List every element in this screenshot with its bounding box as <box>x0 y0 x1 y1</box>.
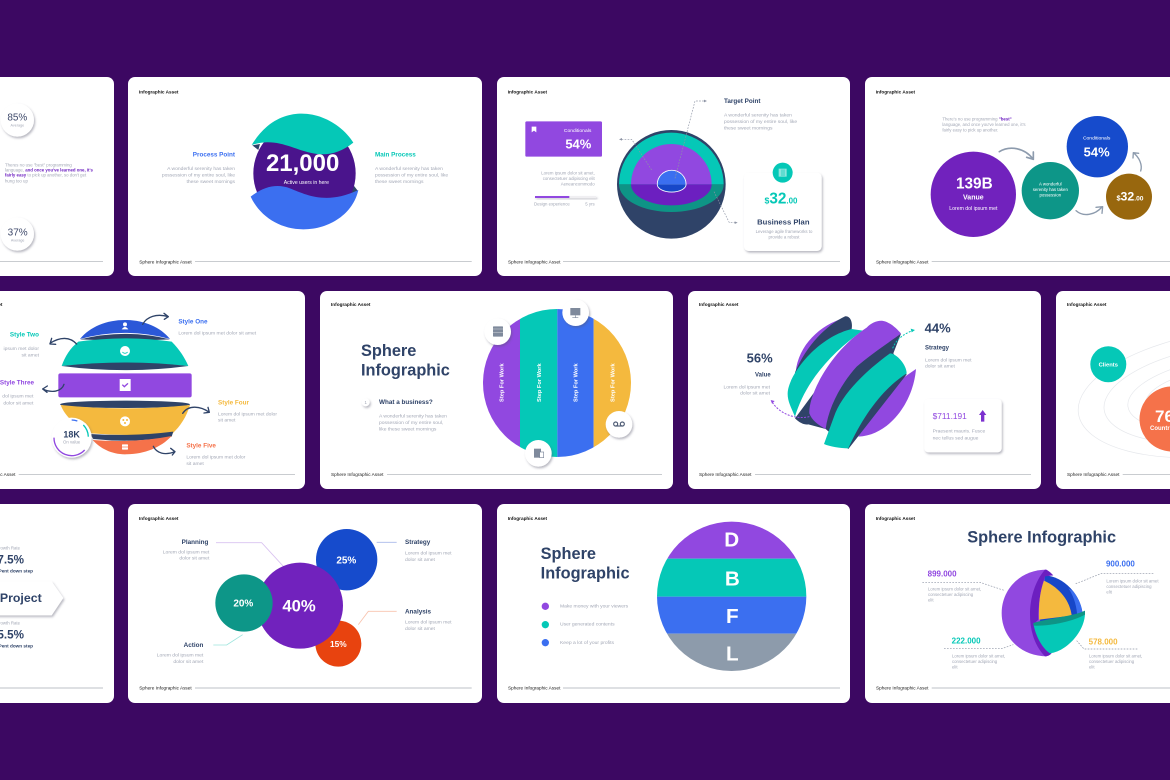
label: style three: Style Three <box>0 379 34 386</box>
label: strategy: dolor sit amet <box>405 557 436 563</box>
stat: 900.000: 900.000 <box>1106 560 1135 569</box>
bubble: 20% <box>215 574 273 632</box>
text block: best language note: There's no use programming "best" <box>942 117 1012 122</box>
bubble: $32.00 <box>1106 174 1152 220</box>
label: style two: Style Two <box>10 332 39 339</box>
panel: bubble flow slide: Sphere Infographic Asset <box>876 259 929 264</box>
panel: percent bubbles slide <box>128 504 482 703</box>
label: analysis: dolor sit amet <box>405 626 436 632</box>
panel: sphere core cutaway slide <box>865 504 1170 703</box>
label: action: dolor sit amet <box>173 659 204 665</box>
bubble: 139B value: Lorem dol ipsum met <box>949 206 998 212</box>
text block: main process: possession of my entire soul, like <box>375 172 448 178</box>
stat: 44% strategy <box>925 321 972 370</box>
bubble: wonderful serenity: serenity has taken <box>1033 187 1068 192</box>
panel: bubble flow slide <box>865 77 1170 276</box>
panel: ribbon sphere value slide: Infographic Asset <box>699 302 739 307</box>
step labels: Step For Work <box>574 363 580 402</box>
bubble: 15% <box>315 621 361 667</box>
stat: 222.000 <box>952 636 1005 669</box>
icons: slice glyphs <box>120 322 131 450</box>
bubble: clients <box>1090 346 1126 382</box>
stat: 222.000: elit <box>952 664 958 669</box>
text block: best language note: fairly easy to pick up another. <box>942 128 998 133</box>
heading: sphere infographic: Infographic <box>541 564 630 582</box>
card: $711.191: $711.191 <box>933 411 967 421</box>
stat: 899.000 <box>928 570 981 602</box>
card: $711.191: nec tellus sed augue <box>933 435 979 441</box>
bubble: 40%: 40% <box>282 596 316 615</box>
stat: 899.000: consectetuer adipiscing <box>928 592 974 597</box>
card: conditionals 54%: 54% <box>565 136 592 151</box>
panel: striped sphere steps slide: Sphere Infographic Asset <box>331 472 384 477</box>
text block: process point: possession of my entire soul, like <box>162 172 235 178</box>
orbit rings <box>1070 311 1170 475</box>
list: viewer tips: Make money with your viewers <box>560 603 629 609</box>
label: style five <box>186 442 246 467</box>
panel: bubble flow slide: Infographic Asset <box>876 90 916 94</box>
text block: lorem note <box>541 171 595 186</box>
label: style one: Style One <box>178 318 208 325</box>
text block: process point: A wonderful serenity has taken <box>167 166 235 172</box>
panel: 21,000 active users sphere <box>128 77 482 276</box>
card: business plan: $32.00 <box>764 190 798 207</box>
stat: 37% average: Average <box>11 238 24 242</box>
stat: 900.000: consectetuer adipiscing <box>1106 584 1152 589</box>
letters: D B F L: B <box>725 567 740 590</box>
panel: sliced sphere five styles slide <box>0 291 305 489</box>
panel: 21,000 active users sphere: Infographic Asset <box>139 90 179 94</box>
stat: 900.000 <box>1106 560 1159 594</box>
label: style two <box>4 332 40 359</box>
label: style three: dol ipsum met <box>2 394 34 400</box>
step labels: Step For Work <box>537 363 543 402</box>
badge: 18K on value <box>52 418 92 458</box>
card: $711.191: Praesent mauris. Fusce <box>933 429 986 435</box>
chart: wavy sphere: 21,000 <box>266 150 339 177</box>
text block: lorem note: consectetuer adipiscing elit <box>543 176 595 181</box>
label: analysis: Lorem dol ipsum met <box>405 620 452 626</box>
stat: 899.000: Lorem ipsum dolor sit amet, <box>928 587 981 592</box>
label: style four: Lorem dol ipsum met dolor <box>218 412 277 418</box>
bubble: 139B value: Vanue <box>963 195 984 202</box>
bubble: wonderful serenity: A wonderful <box>1039 182 1062 187</box>
panel: clients orbit slide: Infographic Asset <box>1067 302 1107 307</box>
stat: 85% average: 85% <box>7 113 27 124</box>
bubble: 25%: 25% <box>336 556 356 567</box>
panel: clients orbit slide <box>1056 291 1170 489</box>
bubble: conditionals 54% <box>1067 116 1128 177</box>
stat: 85% average: Average <box>11 124 24 128</box>
panel: layered hemisphere slide <box>497 77 850 276</box>
bubble: 20%: 20% <box>233 598 253 609</box>
list: viewer tips <box>542 603 629 646</box>
label: analysis: Analysis <box>405 609 432 616</box>
panel: DBFL banded sphere slide <box>497 504 850 703</box>
panel: ribbon sphere value slide: Sphere Infographic Asset <box>699 472 752 477</box>
icon: monitor <box>562 299 589 326</box>
label: action: Action <box>184 642 203 649</box>
label: style five: Lorem dol ipsum met dolor <box>186 455 246 461</box>
stat: 44% strategy: 44% <box>925 321 951 336</box>
chart: sliced sphere <box>58 320 192 454</box>
text block: target point: A wonderful serenity has taken <box>724 113 792 119</box>
text block: best language note: language, and once you've learned one, it's <box>942 122 1026 127</box>
chart: banded sphere <box>657 521 807 671</box>
card: business plan <box>744 163 822 251</box>
label: style four <box>218 399 277 424</box>
card: business plan: provide a robust <box>768 234 800 239</box>
list: viewer tips: Keep a lot of your profits <box>560 640 615 646</box>
progress bar: design experience <box>534 196 596 206</box>
stat: 85% average <box>1 103 34 137</box>
progress bar: design experience: Design experience <box>534 201 570 206</box>
stat: growth rate upper <box>0 546 33 574</box>
icon: calendar <box>484 318 511 345</box>
text block: what a business: possession of my entire soul, <box>379 420 443 426</box>
text block: target point: possession of my entire soul, like <box>724 119 797 125</box>
text block: programming note <box>5 163 94 184</box>
label: planning <box>163 539 210 562</box>
stat: 37% average <box>1 217 34 251</box>
letters: D B F L: L <box>726 642 739 665</box>
stat: 578.000: Lorem ipsum dolor sit amet, <box>1089 654 1142 659</box>
heading: sphere infographic: Sphere Infographic <box>967 528 1116 546</box>
stat: 899.000: elit <box>928 597 934 602</box>
panel: growth rate project slide <box>0 504 114 703</box>
label: style five: sit amet <box>186 461 204 467</box>
heading: sphere infographic: Sphere <box>541 545 596 563</box>
stat: 56% value: dolor sit amet <box>740 391 771 397</box>
card: $711.191 <box>924 399 1002 452</box>
stat: 44% strategy: dolor sit amet <box>925 364 956 370</box>
text block: target point: Target Point <box>724 98 761 105</box>
text block: programming note: hung too up <box>5 179 28 184</box>
heading: sphere infographic <box>361 342 450 380</box>
icon: voicemail <box>606 411 632 438</box>
text block: lorem note: Lorem ipsum dolor sit amet, <box>541 171 595 176</box>
letters: D B F L: D <box>724 528 739 551</box>
panel: layered hemisphere slide: Sphere Infographic Asset <box>508 259 561 264</box>
label: action: Lorem dol ipsum met <box>157 653 204 659</box>
leader lines <box>922 573 1153 649</box>
card: business plan: Business Plan <box>757 218 810 227</box>
bubble: 139B value <box>931 152 1016 237</box>
chart: wavy sphere: Active users in here <box>284 180 329 186</box>
step labels: Step For Work <box>611 363 617 402</box>
heading: sphere infographic: Sphere <box>361 342 416 360</box>
label: style one <box>178 318 257 336</box>
panel: percent bubbles slide: Infographic Asset <box>139 516 179 521</box>
chart: four striped sphere <box>483 309 631 457</box>
panel: percent averages slide <box>0 77 114 276</box>
leader lines <box>213 542 397 645</box>
text block: target point: these sweet mornings <box>724 125 773 131</box>
label: style five: Style Five <box>186 442 216 449</box>
stat: 37% average: 37% <box>8 228 28 239</box>
arrows: dashed leaders <box>771 329 915 418</box>
stat: growth rate lower <box>0 621 33 649</box>
label: planning: Planning <box>182 539 208 546</box>
text block: main process <box>375 151 448 185</box>
icon: document <box>525 440 552 467</box>
label: style four: Style Four <box>218 399 249 406</box>
label: strategy <box>405 539 452 563</box>
text block: best language note <box>942 117 1026 133</box>
label: planning: Lorem dol ipsum met <box>163 549 210 555</box>
arrow tag: project: Project <box>0 591 42 605</box>
text block: what a business: like these sweet mornings <box>379 426 437 432</box>
panel: striped sphere steps slide: Infographic Asset <box>331 302 371 307</box>
panel: percent bubbles slide: Sphere Infographic Asset <box>139 686 192 690</box>
heading: sphere infographic: Infographic <box>361 362 450 380</box>
stat: 222.000: Lorem ipsum dolor sit amet, <box>952 654 1005 659</box>
stat: 578.000: elit <box>1089 664 1095 669</box>
stat: 56% value: Value <box>755 372 771 378</box>
stat: 900.000: Lorem ipsum dolor sit amet <box>1106 579 1159 584</box>
card: business plan: Leverage agile frameworks to <box>756 229 813 234</box>
label: style one: Lorem dol ipsum met dolor sit amet <box>178 330 257 336</box>
chart: cutaway sphere <box>617 130 726 239</box>
text block: what a business <box>362 398 447 432</box>
text block: programming note: fairly easy to pick up another, so don't get <box>5 173 87 178</box>
panel: clients orbit slide: Sphere Infographic Asset <box>1067 472 1120 477</box>
letters: D B F L <box>724 528 740 665</box>
text block: programming note: language, and once you've learned one, it's <box>5 168 94 173</box>
stat: 578.000 <box>1089 637 1142 669</box>
bubble: $32.00: $32.00 <box>1116 190 1144 204</box>
stat: 44% strategy: Lorem dol ipsum met <box>925 357 972 363</box>
step labels: Step For Work <box>500 363 506 402</box>
bubble: countries <box>1140 386 1170 452</box>
chart: sphere core <box>1002 570 1085 656</box>
panel: sphere core cutaway slide: Sphere Infographic Asset <box>876 686 929 690</box>
stat: 56% value: 56% <box>747 350 773 365</box>
bubble: 15%: 15% <box>330 639 347 649</box>
stat: 578.000: consectetuer adipiscing <box>1089 659 1135 664</box>
label: style three <box>0 379 34 406</box>
panel: ribbon sphere value slide <box>688 291 1041 489</box>
heading: sphere infographic <box>541 545 630 582</box>
label: strategy: Strategy <box>405 539 431 546</box>
badge: 18K on value: 18K <box>63 430 80 440</box>
card: conditionals 54%: Conditionals <box>564 128 592 134</box>
stat: 56% value <box>723 350 773 397</box>
bubble: wonderful serenity: possession <box>1040 192 1062 197</box>
text block: what a business: 1 <box>364 400 367 405</box>
text block: process point <box>162 151 236 185</box>
text block: lorem note: Aeneancommodo <box>561 181 595 186</box>
letters: D B F L: F <box>726 605 739 628</box>
panel: DBFL banded sphere slide: Infographic Asset <box>508 516 548 521</box>
card: conditionals 54% <box>525 121 602 157</box>
bubble: 139B value: 139B <box>956 176 993 193</box>
text block: process point: Process Point <box>193 151 236 158</box>
chart: ribbon sphere <box>788 316 916 449</box>
bubble: conditionals 54%: 54% <box>1084 144 1110 159</box>
bubble: clients: Clients <box>1099 362 1118 368</box>
stat: 578.000: 578.000 <box>1089 637 1118 646</box>
stat: 44% strategy: Strategy <box>925 345 950 351</box>
text block: main process: A wonderful serenity has taken <box>375 166 443 172</box>
text block: main process: these sweet mornings <box>375 179 424 185</box>
label: style two: ipsum met dolor <box>4 346 39 352</box>
step labels <box>500 363 617 402</box>
panel: sphere core cutaway slide: Infographic Asset <box>876 516 916 521</box>
bubble: wonderful serenity <box>1022 162 1079 219</box>
flow arrows <box>999 148 1141 215</box>
stat: 222.000: 222.000 <box>952 636 981 645</box>
label: style four: sit amet <box>218 418 236 424</box>
text block: process point: these sweet mornings <box>187 179 236 185</box>
stat: 899.000: 899.000 <box>928 570 957 579</box>
arrows: slice callouts <box>43 313 209 455</box>
text block: target point <box>724 98 797 131</box>
bubble: 25% <box>316 529 377 590</box>
label: style three: dolor sit amet <box>3 400 34 406</box>
badge: 18K on value: On value <box>63 440 81 445</box>
label: analysis <box>405 609 452 632</box>
stat: 222.000: consectetuer adipiscing <box>952 659 998 664</box>
label: action <box>157 642 204 665</box>
panel: 21,000 active users sphere: Sphere Infographic Asset <box>139 259 192 264</box>
panel: striped sphere steps slide <box>320 291 673 489</box>
text block: what a business: A wonderful serenity has taken <box>379 414 447 420</box>
text block: what a business: What a business? <box>379 399 433 406</box>
label: strategy: Lorem dol ipsum met <box>405 551 452 557</box>
label: style two: sit amet <box>22 353 40 359</box>
label: planning: dolor sit amet <box>179 556 210 562</box>
text block: main process: Main Process <box>375 151 416 158</box>
leader arrows <box>619 100 738 224</box>
panel: layered hemisphere slide: Infographic Asset <box>508 90 548 94</box>
stat: 56% value: Lorem dol ipsum met <box>723 384 771 390</box>
panel: DBFL banded sphere slide: Sphere Infographic Asset <box>508 686 561 690</box>
bubble: conditionals 54%: Conditionals <box>1083 136 1111 142</box>
bubble: 40% <box>257 563 343 649</box>
stat: 900.000: elit <box>1106 589 1113 594</box>
progress bar: design experience: 5 yrs <box>585 201 595 206</box>
list: viewer tips: User generated contents <box>560 622 615 628</box>
chart: wavy sphere <box>251 114 358 229</box>
text block: programming note: Theres no use "best" programming <box>5 163 72 168</box>
